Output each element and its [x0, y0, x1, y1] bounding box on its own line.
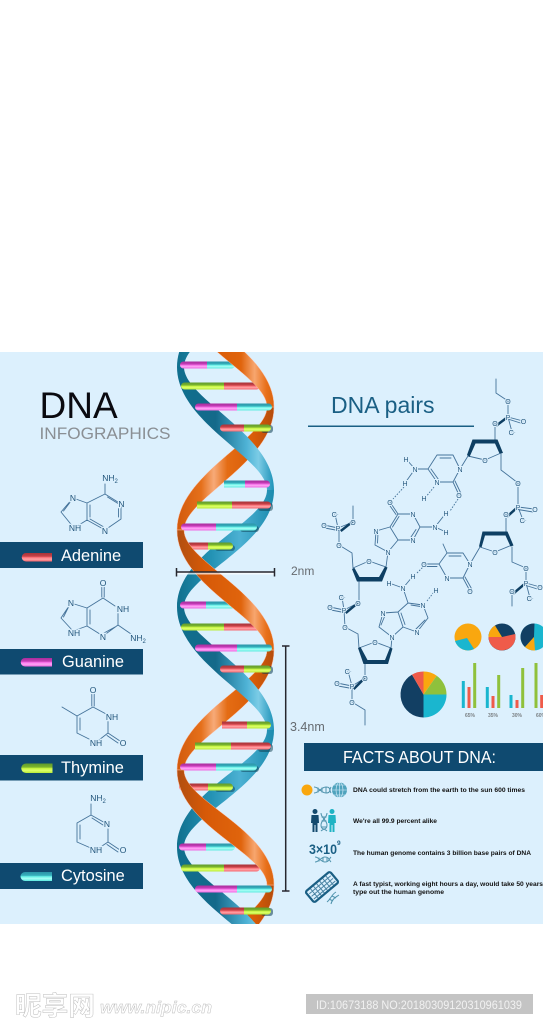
molecule: DNA base pairs structure: N — [420, 603, 426, 610]
molecule: adenine: N — [102, 526, 108, 536]
molecule: thymine: NH — [106, 712, 118, 722]
pie chart small 1 — [454, 624, 482, 650]
bar chart: 65% — [465, 713, 476, 719]
molecule: adenine: 2 — [114, 479, 118, 485]
front base pair rungs — [195, 404, 272, 892]
molecule: guanine: 2 — [142, 639, 146, 645]
molecule: DNA base pairs structure: O — [537, 585, 543, 592]
molecule: DNA base pairs structure: O — [387, 500, 393, 507]
measure: 3.4nm — [282, 646, 325, 891]
fact text 3: The human genome contains 3 billion base pairs of DNA — [353, 850, 531, 857]
molecule: DNA base pairs structure: N — [410, 512, 416, 519]
watermark: image ID — [306, 994, 533, 1014]
molecule: cytosine: 2 — [102, 799, 106, 805]
watermark: nipic logo: www.nipic.cn — [100, 998, 212, 1017]
molecule: DNA base pairs structure: O — [349, 700, 355, 707]
molecule: DNA base pairs structure: O — [509, 589, 515, 596]
bar chart — [462, 663, 543, 719]
molecule: guanine: NH — [130, 633, 142, 643]
molecule: adenine: N — [118, 499, 125, 509]
pie chart small 2 — [488, 624, 516, 650]
molecule: DNA base pairs structure: O — [456, 493, 462, 500]
fact text 5: type out the human genome — [353, 889, 444, 896]
molecule: DNA base pairs structure: N — [400, 586, 406, 593]
molecule: DNA base pairs structure: N — [432, 525, 438, 532]
pie chart large — [401, 672, 446, 718]
label bar: Guanine: Guanine — [62, 653, 124, 671]
label bar: Guanine — [0, 649, 143, 674]
swatch: guanine magenta — [21, 658, 52, 666]
molecule: DNA base pairs structure: O — [509, 430, 514, 437]
fact text 4: A fast typist, working eight hours a day, would take 50 years — [353, 881, 543, 888]
molecule: guanine: NH — [117, 604, 129, 614]
pie chart small 3 — [520, 623, 543, 651]
molecule: DNA base pairs structure: O — [503, 512, 509, 519]
front orange strand segments — [177, 287, 274, 885]
title: DNA: DNA — [40, 385, 118, 426]
icon: 3x10^9: 9 — [337, 840, 341, 847]
molecule: cytosine: NH — [90, 793, 102, 803]
label bar: Cytosine — [0, 863, 143, 889]
fact text 1: DNA could stretch from the earth to the sun 600 times — [353, 787, 525, 794]
molecule: DNA base pairs structure: H — [421, 496, 427, 503]
molecule: thymine: NH — [90, 738, 102, 748]
fact text 2: We're all 99.9 percent alike — [353, 818, 437, 825]
molecule: DNA base pairs structure: - — [350, 668, 352, 673]
molecule: DNA base pairs structure: H — [386, 581, 392, 588]
molecule: adenine — [61, 473, 125, 536]
background panel — [0, 352, 543, 924]
molecule: cytosine: O — [120, 845, 127, 855]
label bar: Adenine — [0, 542, 143, 568]
swatch: thymine green — [21, 764, 52, 773]
molecule: DNA base pairs structure: N — [444, 576, 450, 583]
molecule: DNA base pairs structure: O — [505, 399, 511, 406]
molecule: guanine: N — [100, 632, 106, 642]
subtitle: INFOGRAPHICS: INFOGRAPHICS — [40, 424, 170, 443]
molecule: DNA base pairs structure: P — [342, 608, 347, 615]
molecule: DNA base pairs structure: N — [380, 611, 386, 618]
molecule: DNA base pairs structure: H — [402, 481, 408, 488]
front blue strand segments — [177, 367, 274, 967]
molecule: DNA base pairs structure: H — [433, 588, 439, 595]
molecule: DNA base pairs structure: O — [334, 681, 340, 688]
label bar: Thymine — [0, 755, 143, 780]
molecule: DNA base pairs structure: O — [520, 518, 525, 525]
molecule: DNA base pairs structure: - — [525, 517, 527, 522]
molecule: DNA base pairs structure: P — [516, 505, 521, 512]
molecule: DNA base pairs structure: N — [389, 635, 395, 642]
molecule: DNA base pairs structure: N — [410, 538, 416, 545]
molecule: guanine: N — [68, 598, 74, 608]
molecule: DNA base pairs structure: O — [482, 458, 488, 465]
molecule: DNA base pairs structure: N — [385, 550, 391, 557]
molecule: DNA base pairs structure: O — [339, 595, 344, 602]
molecule: DNA base pairs structure: O — [372, 640, 378, 647]
label bar: Adenine: Adenine — [61, 547, 121, 565]
molecule: DNA base pairs structure: N — [412, 467, 418, 474]
heading bar: FACTS ABOUT DNA: FACTS ABOUT DNA: — [343, 747, 496, 767]
watermark: nipic logo: 昵享网 — [15, 986, 95, 1023]
measure: 2nm: 2nm — [291, 564, 314, 578]
molecule: DNA base pairs structure: P — [524, 581, 529, 588]
molecule: adenine: NH — [102, 473, 114, 483]
molecule: DNA base pairs structure: O — [532, 507, 538, 514]
molecule: adenine: N — [70, 493, 76, 503]
molecule: cytosine: N — [104, 819, 110, 829]
molecule: guanine: NH — [68, 628, 80, 638]
molecule: DNA base pairs structure: - — [532, 595, 534, 600]
molecule: DNA base pairs structure: N — [434, 480, 440, 487]
molecule: adenine: NH — [69, 523, 81, 533]
swatch: adenine red — [22, 553, 52, 562]
molecule: thymine — [62, 685, 127, 748]
molecule: DNA base pairs structure: - — [344, 594, 346, 599]
molecule: DNA base pairs structure: O — [336, 543, 342, 550]
DNA double helix — [176, 352, 274, 924]
molecule: DNA base pairs structure: O — [342, 625, 348, 632]
icon: 3x10^9: 3×10 — [309, 842, 337, 857]
molecule: DNA base pairs structure: O — [515, 481, 521, 488]
molecule: DNA base pairs structure: O — [366, 559, 372, 566]
molecule: DNA base pairs structure: O — [327, 605, 333, 612]
molecule: thymine: O — [90, 685, 97, 695]
molecule: cytosine: NH — [90, 845, 102, 855]
molecule: DNA base pairs structure: O — [421, 562, 427, 569]
label bar: Thymine: Thymine — [61, 759, 124, 777]
icon: sun, DNA, earth — [302, 782, 347, 798]
molecule: cytosine — [77, 793, 127, 855]
molecule: DNA base pairs structure: N — [414, 630, 420, 637]
molecule: DNA base pairs structure: H — [403, 457, 409, 464]
watermark: image ID: ID:10673188 NO:20180309120310961039 — [316, 1000, 522, 1012]
molecule: DNA base pairs structure: H — [443, 511, 449, 518]
molecule: DNA base pairs structure: O — [362, 676, 368, 683]
molecule: DNA base pairs structure: O — [345, 669, 350, 676]
molecule: DNA base pairs structure: O — [523, 566, 529, 573]
molecule: DNA base pairs structure: P — [336, 526, 341, 533]
molecule: DNA base pairs structure: H — [443, 530, 449, 537]
molecule: guanine: O — [100, 578, 107, 588]
molecule: DNA base pairs structure: - — [337, 511, 339, 516]
icon: keyboard — [305, 871, 339, 904]
measure: 3.4nm: 3.4nm — [290, 720, 325, 734]
molecule: DNA base pairs structure: H — [410, 574, 416, 581]
swatch: cytosine cyan — [21, 872, 52, 881]
molecule: DNA base pairs structure: O — [321, 523, 327, 530]
molecule: DNA base pairs structure: - — [514, 429, 516, 434]
molecule: guanine — [61, 578, 146, 645]
molecule: DNA base pairs structure — [321, 379, 543, 725]
molecule: DNA base pairs structure: P — [506, 415, 511, 422]
molecule: DNA base pairs structure: O — [355, 601, 361, 608]
icon: 3x10^9 — [309, 840, 341, 862]
watermark: nipic logo — [15, 986, 212, 1023]
back strand segments — [176, 352, 274, 924]
base pair rungs — [179, 362, 273, 916]
bar chart: 30% — [512, 713, 523, 719]
molecule: thymine: O — [120, 738, 127, 748]
molecule: DNA base pairs structure: O — [521, 419, 527, 426]
molecule: DNA base pairs structure: O — [332, 512, 337, 519]
molecule: DNA base pairs structure: N — [467, 562, 473, 569]
heading: DNA pairs: DNA pairs — [331, 392, 435, 418]
measure: 2nm — [176, 564, 314, 578]
molecule: DNA base pairs structure: N — [457, 467, 463, 474]
molecule: DNA base pairs structure: O — [527, 596, 532, 603]
heading bar: FACTS ABOUT DNA — [304, 743, 543, 771]
icon: two people with DNA — [311, 809, 336, 832]
molecule: DNA base pairs structure: O — [492, 421, 498, 428]
molecule: DNA base pairs structure: N — [373, 529, 379, 536]
molecule: DNA base pairs structure: O — [467, 589, 473, 596]
label bar: Cytosine: Cytosine — [61, 867, 125, 885]
molecule: DNA base pairs structure: O — [350, 520, 356, 527]
molecule: DNA base pairs structure: O — [492, 550, 498, 557]
bar chart: 35% — [488, 713, 499, 719]
molecule: DNA base pairs structure: P — [350, 684, 355, 691]
